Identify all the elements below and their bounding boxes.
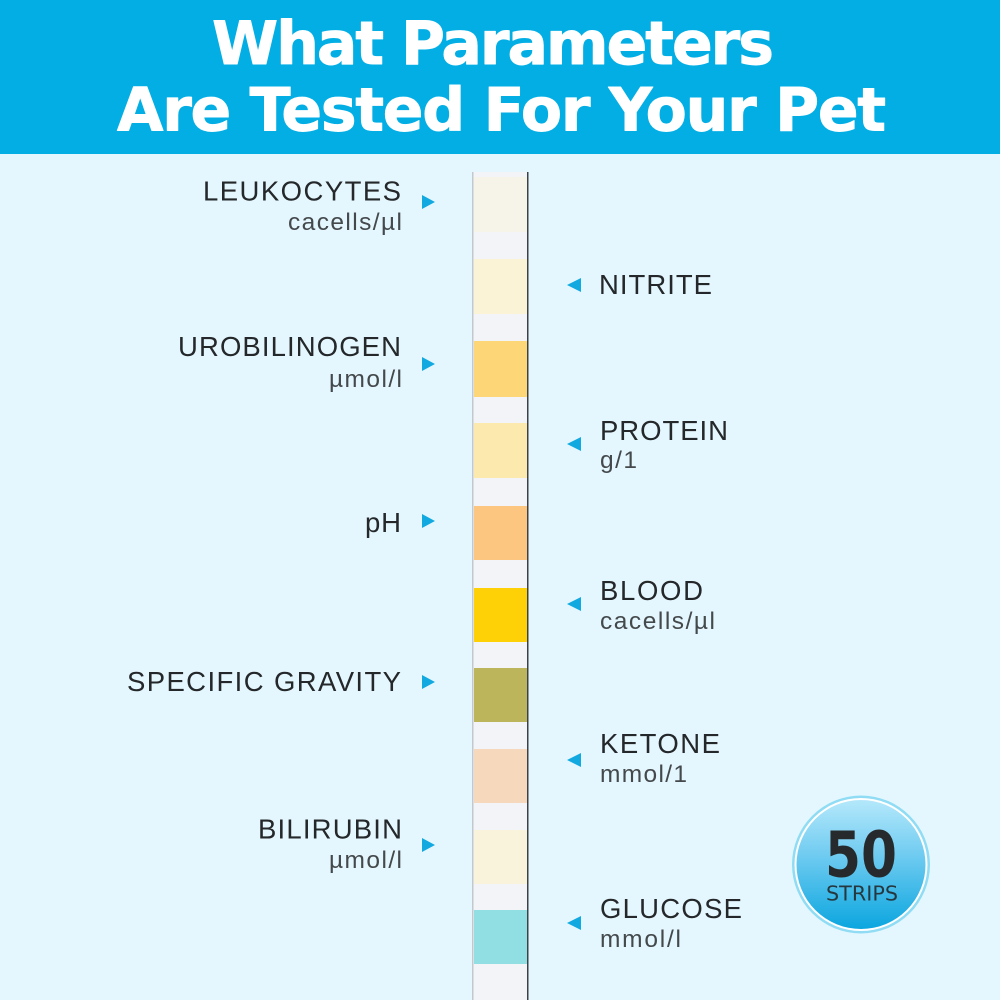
label: leukocytes: LEUKOCYTES bbox=[203, 176, 401, 206]
label: blood bbox=[567, 575, 715, 635]
pad: bilirubin bbox=[474, 830, 527, 884]
label: glucose: GLUCOSE bbox=[600, 893, 742, 924]
label: urobilinogen: UROBILINOGEN bbox=[178, 331, 401, 362]
label: pH: pH bbox=[365, 507, 401, 538]
pad: glucose bbox=[474, 910, 527, 964]
test strip bbox=[472, 172, 528, 1000]
pad: protein bbox=[474, 423, 527, 478]
pad: ketone bbox=[474, 749, 527, 803]
label: ketone: mmol/1 bbox=[600, 761, 687, 788]
label: bilirubin: µmol/l bbox=[329, 847, 402, 874]
label: protein bbox=[567, 415, 728, 474]
pad: pH bbox=[474, 506, 527, 560]
label: ketone bbox=[567, 728, 720, 788]
badge: 50 strips bbox=[792, 796, 930, 934]
label: glucose: mmol/l bbox=[600, 926, 681, 953]
badge: 50 strips: STRIPS bbox=[826, 882, 898, 906]
label: blood: BLOOD bbox=[600, 575, 703, 606]
label: bilirubin bbox=[258, 814, 435, 874]
pad: urobilinogen bbox=[474, 341, 527, 397]
label: protein: PROTEIN bbox=[600, 415, 728, 446]
label: pH bbox=[365, 507, 435, 538]
title banner bbox=[0, 0, 1000, 154]
title: What Parameters bbox=[212, 9, 774, 79]
title: Are Tested For Your Pet bbox=[117, 76, 886, 146]
label: blood: cacells/µl bbox=[600, 608, 715, 635]
label: bilirubin: BILIRUBIN bbox=[258, 814, 402, 844]
label: leukocytes: cacells/µl bbox=[288, 209, 402, 236]
label: protein: g/1 bbox=[600, 447, 637, 474]
badge: 50 strips: 50 bbox=[825, 818, 897, 892]
pad: specific gravity bbox=[474, 668, 527, 722]
label: glucose bbox=[567, 893, 742, 953]
pad: nitrite bbox=[474, 259, 527, 314]
label: nitrite: NITRITE bbox=[599, 269, 712, 300]
title bbox=[117, 9, 886, 146]
label: specific gravity: SPECIFIC GRAVITY bbox=[127, 666, 401, 697]
pad: blood bbox=[474, 588, 527, 642]
label: urobilinogen bbox=[178, 331, 435, 393]
label: leukocytes bbox=[203, 176, 435, 236]
label: ketone: KETONE bbox=[600, 728, 720, 759]
pad: leukocytes bbox=[474, 177, 527, 232]
label: urobilinogen: µmol/l bbox=[329, 366, 402, 393]
